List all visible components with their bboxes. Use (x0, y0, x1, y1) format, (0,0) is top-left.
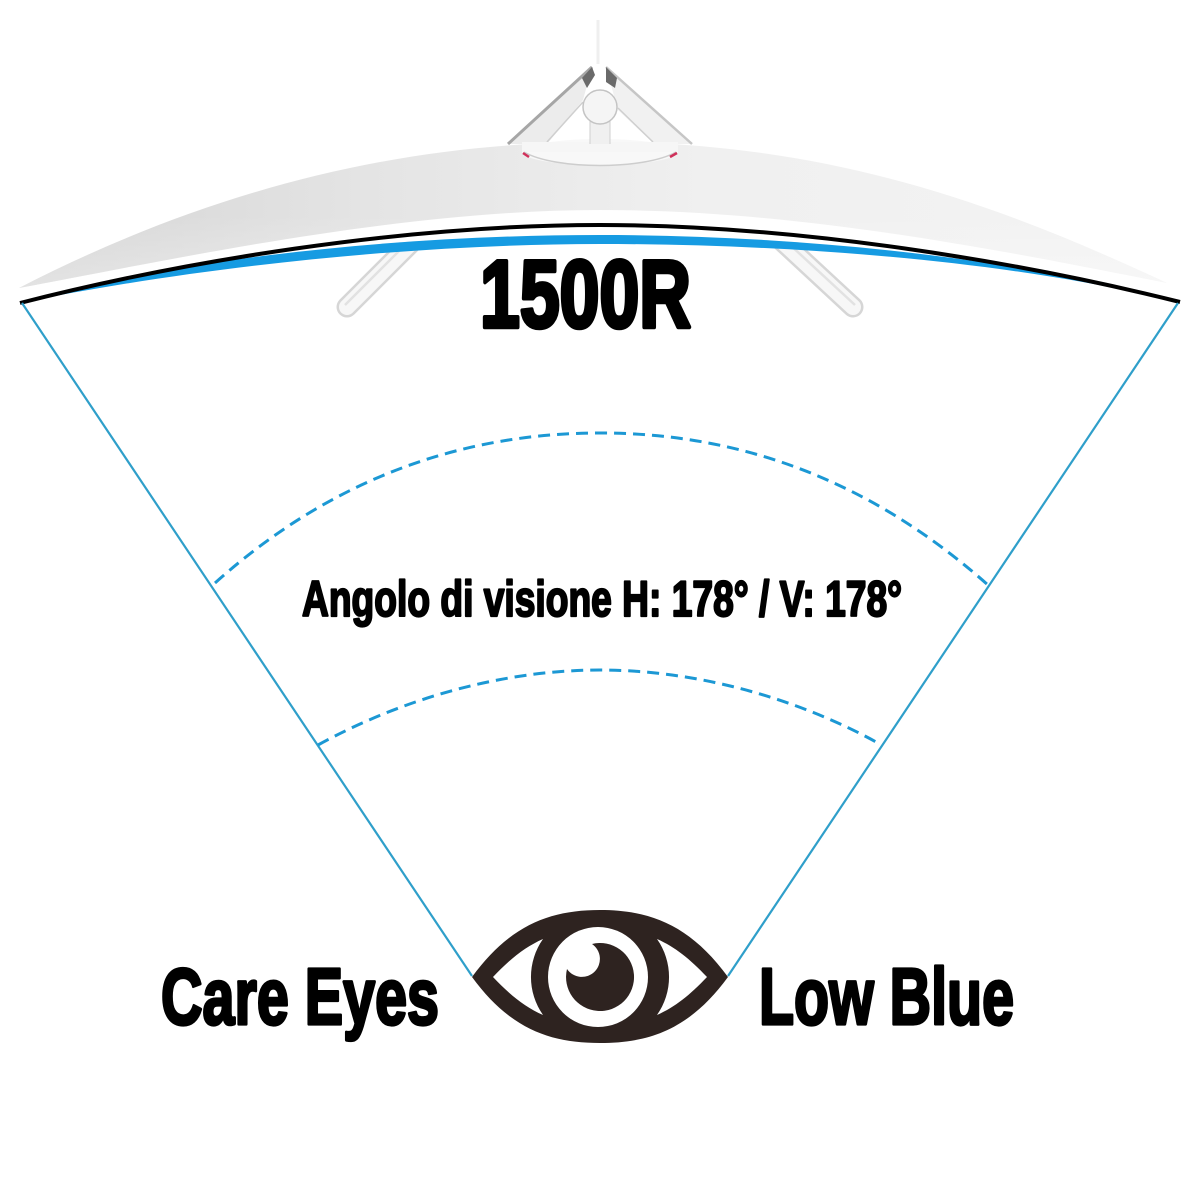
left label: Care Eyes (161, 952, 439, 1041)
stand neck (583, 90, 617, 144)
curved monitor top view (19, 20, 1180, 307)
blue screen curve (20, 235, 1180, 303)
right label: Low Blue (759, 952, 1014, 1041)
stand base (522, 139, 678, 166)
icon: eye (472, 910, 728, 1043)
stand antenna (596, 20, 600, 64)
outer dashed arc (215, 433, 988, 585)
black screen edge (20, 225, 1180, 303)
curvature heading: 1500R (480, 241, 691, 348)
stand arms (508, 67, 692, 144)
white mask above screen (20, 130, 1180, 303)
inner dashed arc (318, 670, 878, 745)
viewing angle label: Angolo di visione H: 178° / V: 178° (302, 571, 902, 627)
monitor back shell (19, 142, 1167, 288)
viewing cone lines (22, 303, 1178, 976)
stand legs (345, 230, 855, 307)
